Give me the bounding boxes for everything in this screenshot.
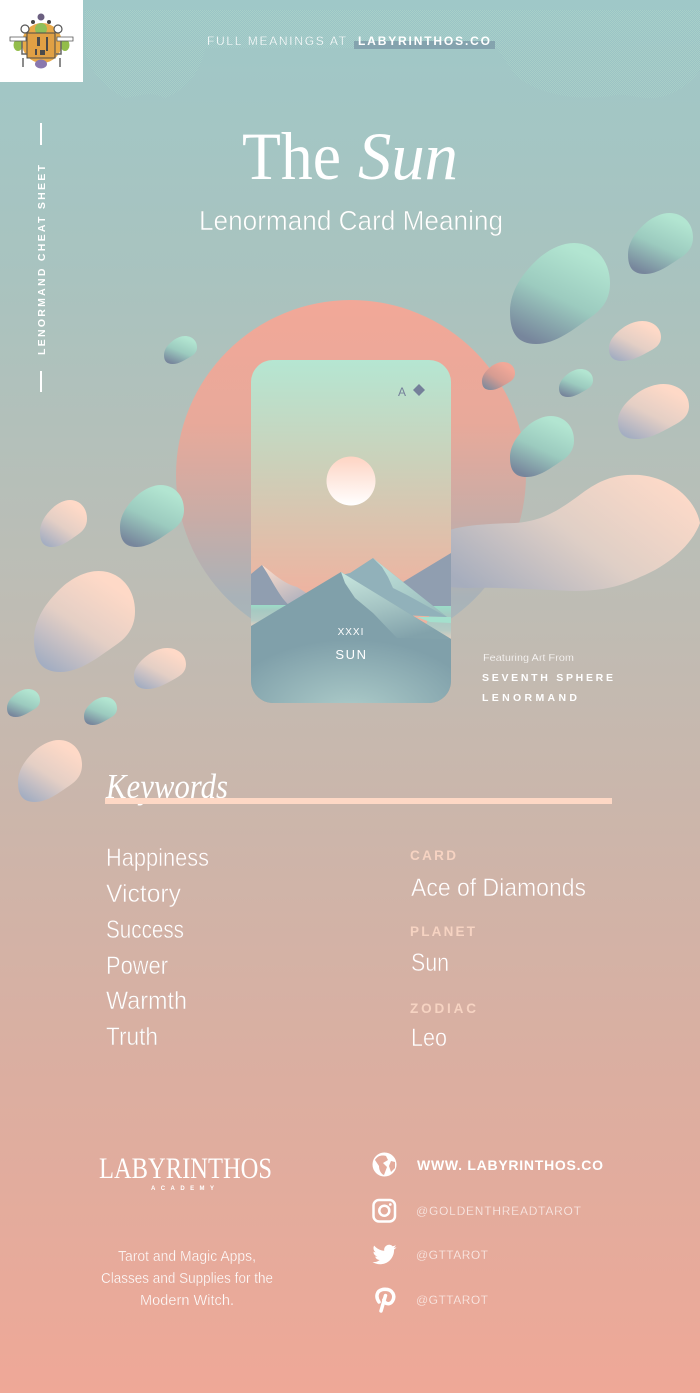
keyword list: Happiness [106,844,209,872]
art credit: LENORMAND [482,692,577,704]
tagline [101,1248,273,1309]
labyrinthos wordmark: ACADEMY [151,1186,214,1192]
labyrinthos wordmark [99,1152,272,1192]
stone: peach mid left [134,648,186,689]
icon: pinterest [377,1289,394,1311]
keyword list: Power [106,952,168,980]
stone: peach right [618,384,689,439]
keyword list: Victory [106,880,181,908]
card attributes: Sun [411,949,449,977]
stone: peach right small [609,321,661,361]
website address: WWW. LABYRINTHOS.CO [417,1157,603,1173]
keyword list: Warmth [106,987,187,1015]
stone: peach large left [34,571,135,672]
stone: top right mint [628,213,693,274]
title: The [242,118,341,194]
keyword list: Truth [106,1023,158,1051]
stone: mid mint [510,416,574,477]
stone: large mint [510,243,610,344]
logo badge [0,0,83,82]
website row [372,1152,603,1176]
vertical side label: LENORMAND CHEAT SHEET [36,164,48,355]
tagline: Classes and Supplies for the [101,1270,273,1287]
art credit: Featuring Art From [483,652,574,664]
large sun circle [176,300,526,650]
card attributes: PLANET [410,924,476,939]
subtitle: Lenormand Card Meaning [199,205,503,236]
stone: small mint right [559,369,593,397]
floating mint and peach stones [7,213,693,802]
header link [207,34,495,49]
stone: small mint lower left [84,697,117,725]
decorative dither texture [85,10,700,98]
card sun [326,456,376,506]
card attributes: Ace of Diamonds [411,874,586,902]
keyword list: Success [106,916,184,944]
twitter handle: @GTTAROT [416,1248,489,1262]
stone: small mint far left [7,689,40,717]
tagline: Modern Witch. [140,1292,234,1309]
stone: peach upper left [40,500,87,547]
peach wave shape [440,475,700,591]
card name: SUN [335,647,368,662]
twitter row [372,1245,489,1264]
card suit: A [398,385,406,399]
title [242,118,458,194]
card suit [398,384,425,399]
title: Sun [358,118,458,194]
art credit [482,652,613,704]
icon: twitter bird [372,1245,396,1264]
header link: LABYRINTHOS.CO [358,34,490,48]
tagline: Tarot and Magic Apps, [118,1248,256,1265]
stone: left mint [120,485,184,547]
stone: peach bottom left [18,740,82,802]
pinterest row [377,1289,489,1311]
stone: small mint top left [164,336,197,364]
keyword list [106,844,209,1051]
instagram handle: @GOLDENTHREADTAROT [416,1204,582,1218]
card attributes [410,848,586,1052]
keywords heading: Keywords [105,767,228,806]
tarot card [251,360,451,703]
icon: instagram [374,1200,395,1222]
card attributes: CARD [410,848,456,863]
card attributes: ZODIAC [410,1001,476,1016]
art credit: SEVENTH SPHERE [482,672,613,684]
labyrinthos wordmark: LABYRINTHOS [99,1152,272,1185]
instagram row [374,1200,582,1222]
keywords heading [105,767,612,806]
header link: FULL MEANINGS AT [207,34,347,48]
icon: globe [372,1152,396,1176]
pinterest handle: @GTTAROT [416,1293,489,1307]
card scene: mountains [251,553,451,703]
stone: salmon [482,362,515,390]
card attributes: Leo [411,1024,447,1052]
card number: XXXI [338,627,364,638]
